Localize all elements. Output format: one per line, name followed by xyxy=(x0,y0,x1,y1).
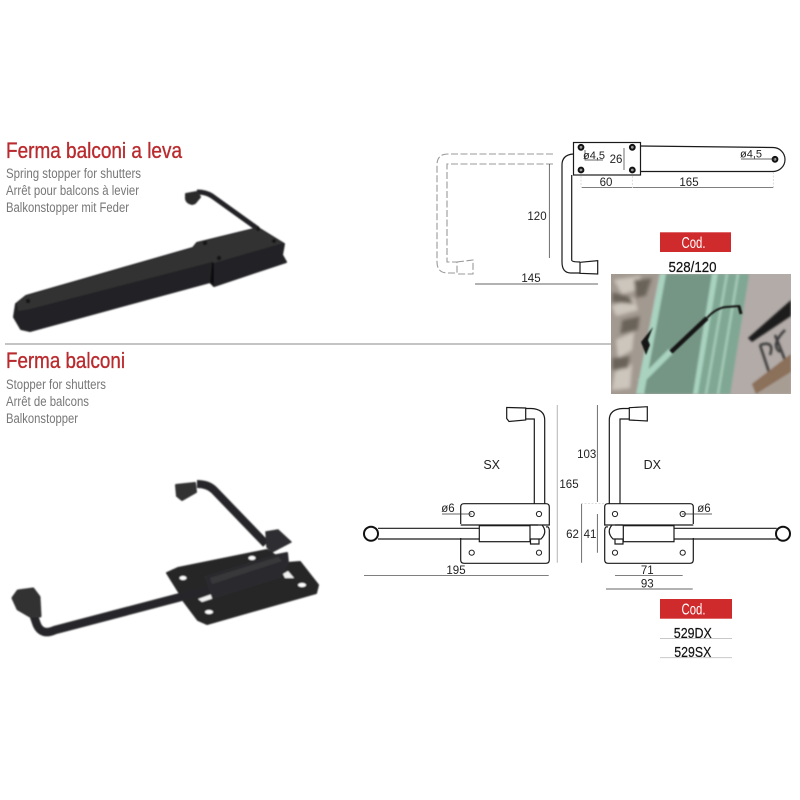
dimensions DX: 71 xyxy=(641,565,654,577)
dimensions DX: 93 xyxy=(641,578,654,590)
translations xyxy=(6,166,141,215)
dimensions DX: ø6 xyxy=(697,503,711,515)
technical drawing: SX version xyxy=(364,405,579,577)
handle SX xyxy=(507,408,545,504)
technical drawing: DX version xyxy=(566,405,790,590)
translations: Balkonstopper mit Feder xyxy=(6,200,129,215)
holes SX xyxy=(469,511,542,555)
dimensions: ø4,5 xyxy=(740,148,762,160)
dimensions SX xyxy=(364,405,579,577)
translations xyxy=(6,377,106,426)
dimensions DX: 41 xyxy=(584,529,596,541)
technical drawing: lever stopper xyxy=(437,142,785,285)
cod label: Cod. xyxy=(682,235,706,252)
translations: Arrêt pour balcons à levier xyxy=(6,183,139,198)
divider rule xyxy=(5,343,611,345)
photo: installed stopper on green shutter xyxy=(611,274,791,394)
heading block: Ferma balconi xyxy=(6,348,125,426)
mounting plate xyxy=(574,142,640,175)
railing xyxy=(748,300,791,394)
dimensions xyxy=(475,148,775,285)
lever arm xyxy=(640,146,785,172)
stopper lever xyxy=(641,306,741,355)
dimensions SX: SX xyxy=(483,458,501,472)
handle xyxy=(562,154,598,274)
stone wall xyxy=(611,274,660,394)
dimensions: 60 xyxy=(600,177,612,189)
dimensions: 120 xyxy=(527,211,547,223)
dimensions: 26 xyxy=(610,154,622,166)
screw holes xyxy=(579,145,777,172)
code 529DX: 529DX xyxy=(674,625,712,642)
dimensions SX: 195 xyxy=(446,565,466,577)
title: Ferma balconi: Ferma balconi xyxy=(6,348,125,373)
green shutter xyxy=(636,274,749,394)
code box 528/120 xyxy=(660,232,731,276)
code table 529 xyxy=(660,599,732,661)
translations: Arrêt de balcons xyxy=(6,394,89,409)
dimensions SX: ø6 xyxy=(441,503,455,515)
handle DX xyxy=(609,407,647,504)
dimensions DX: 103 xyxy=(577,449,596,461)
dimensions DX xyxy=(566,405,712,590)
dashed open position xyxy=(437,154,553,274)
rod and knob DX xyxy=(609,525,790,544)
dimensions: 165 xyxy=(679,177,699,189)
rod and knob SX xyxy=(364,525,545,544)
product photo: lever stopper xyxy=(14,192,286,331)
translations: Stopper for shutters xyxy=(6,377,106,392)
dimensions: 145 xyxy=(521,273,541,285)
title: Ferma balconi a leva: Ferma balconi a leva xyxy=(6,138,183,163)
code 529SX: 529SX xyxy=(674,644,711,661)
dimensions DX: 62 xyxy=(566,529,579,541)
dimensions DX: DX xyxy=(644,458,662,472)
translations: Balkonstopper xyxy=(6,411,78,426)
translations: Spring stopper for shutters xyxy=(6,166,141,181)
heading block: Ferma balconi a leva xyxy=(6,138,183,215)
plate SX xyxy=(461,504,549,563)
code 528/120: 528/120 xyxy=(668,259,716,276)
dimensions SX: 165 xyxy=(559,479,579,491)
product photo: stopper xyxy=(13,483,318,632)
holes DX xyxy=(612,511,685,555)
dimensions: ø4,5 xyxy=(583,150,605,162)
plate DX xyxy=(605,504,693,563)
cod label: Cod. xyxy=(682,602,706,618)
